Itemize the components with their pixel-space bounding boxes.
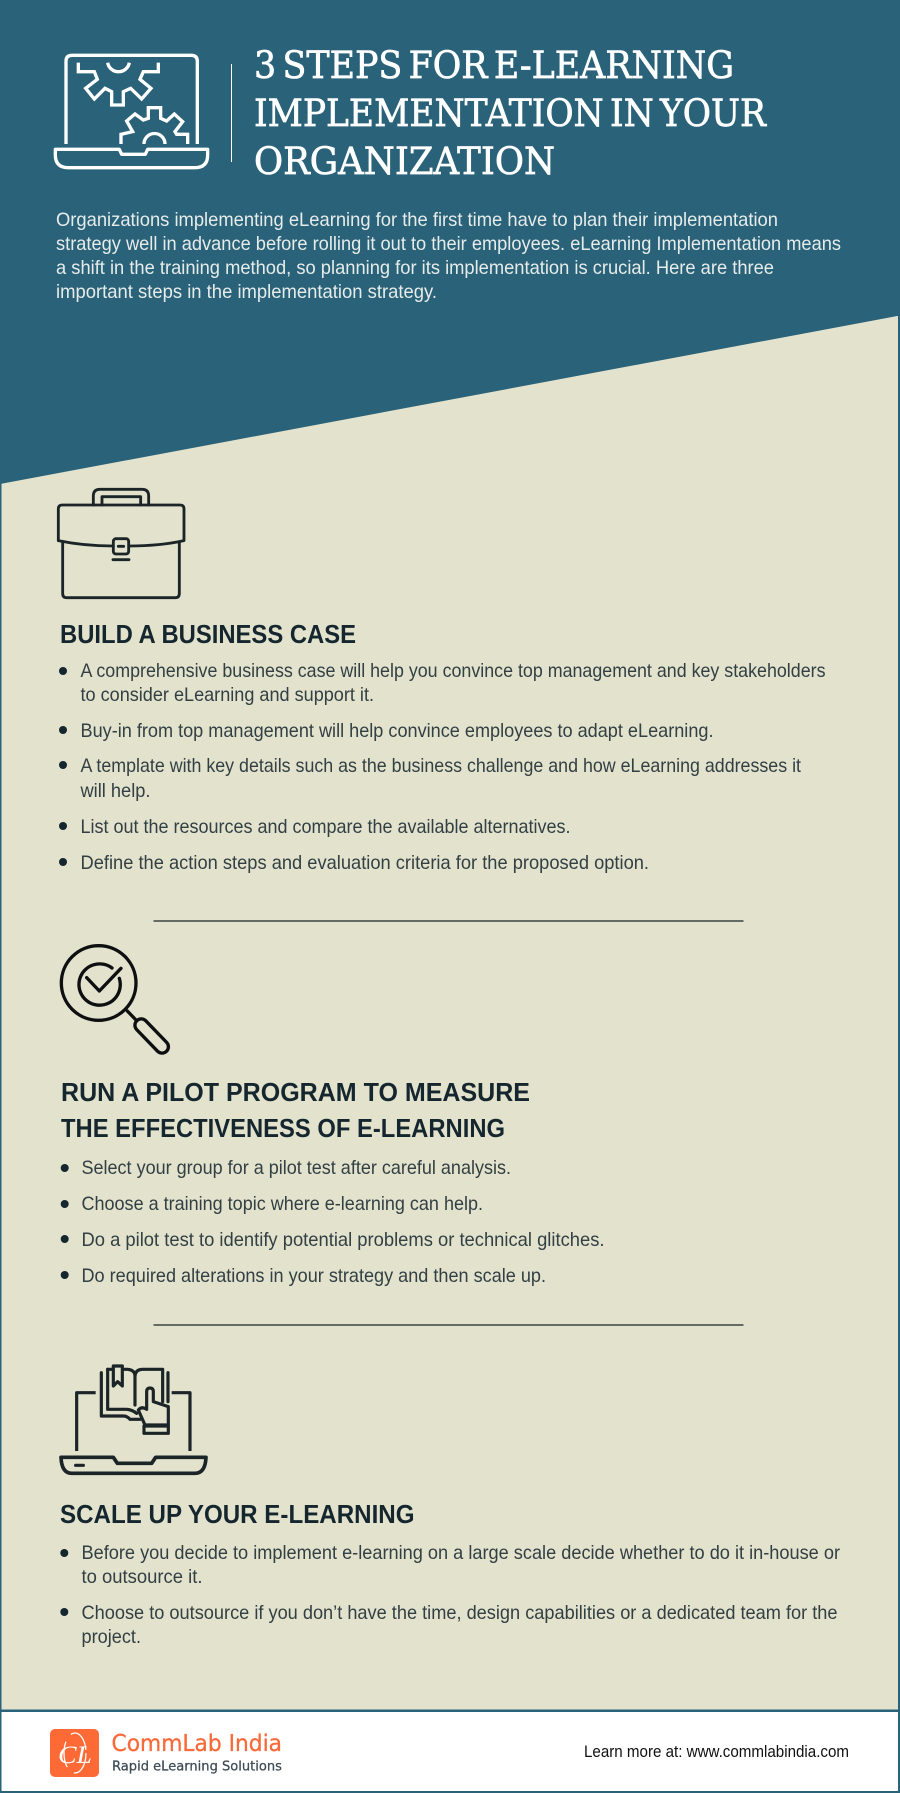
section 2 bullets <box>61 1157 604 1287</box>
section 3 bullets: Before you decide to implement e-learning on a large scale decide whether to do it in-house or <box>82 1542 840 1564</box>
intro paragraph <box>56 209 841 303</box>
icon: laptop with book and pointing hand <box>61 1366 206 1473</box>
section 1 bullets: Define the action steps and evaluation criteria for the proposed option. <box>80 852 649 874</box>
footer link text: Learn more at: www.commlabindia.com <box>584 1743 849 1761</box>
intro paragraph: Organizations implementing eLearning for the first time have to plan their implementation <box>56 209 778 231</box>
logo: CommLab India <box>50 1729 282 1777</box>
title <box>254 44 767 183</box>
section 2 bullets: Select your group for a pilot test after careful analysis. <box>82 1157 511 1179</box>
section 1 bullets: will help. <box>80 780 150 802</box>
section 2 bullets: Do required alterations in your strategy and then scale up. <box>82 1265 546 1287</box>
logo: CommLab India: CL <box>58 1742 92 1769</box>
section 3 bullets: to outsource it. <box>82 1566 202 1588</box>
divider: title rule <box>230 64 232 162</box>
title: 3 STEPS FOR E-LEARNING <box>254 44 734 87</box>
title: IMPLEMENTATION IN YOUR <box>254 92 767 135</box>
section 3 bullets: project. <box>82 1626 141 1648</box>
section 2 bullets: Choose a training topic where e-learning can help. <box>82 1193 483 1215</box>
panel: footer <box>0 1710 900 1793</box>
section 1 bullets <box>59 660 826 874</box>
logo: CommLab India: Rapid eLearning Solutions <box>112 1758 282 1774</box>
section 2 bullets: Do a pilot test to identify potential problems or technical glitches. <box>82 1229 604 1251</box>
section 1 bullets: to consider eLearning and support it. <box>80 684 374 706</box>
title: ORGANIZATION <box>254 140 555 183</box>
section 3 bullets: Choose to outsource if you don’t have the time, design capabilities or a dedicated team for the <box>82 1602 838 1624</box>
section 1 heading: BUILD A BUSINESS CASE <box>60 619 356 649</box>
icon: briefcase <box>58 489 184 598</box>
intro paragraph: a shift in the training method, so planning for its implementation is crucial. Here are three <box>56 257 774 279</box>
section 3 bullets <box>60 1542 840 1648</box>
section 1 bullets: Buy-in from top management will help convince employees to adapt eLearning. <box>80 720 714 742</box>
icon: laptop with gears <box>55 55 208 168</box>
intro paragraph: strategy well in advance before rolling it out to their employees. eLearning Implementation means <box>56 233 841 255</box>
section 1 bullets: A comprehensive business case will help you convince top management and key stakeholders <box>80 660 826 682</box>
section 2 heading <box>61 1077 530 1143</box>
panel: blue header with diagonal edge <box>0 0 900 484</box>
logo: CommLab India: CommLab India <box>112 1731 282 1757</box>
intro paragraph: important steps in the implementation strategy. <box>56 281 437 303</box>
section 1 bullets: List out the resources and compare the available alternatives. <box>80 816 570 838</box>
section 2 heading: RUN A PILOT PROGRAM TO MEASURE <box>61 1077 530 1107</box>
section 1 bullets: A template with key details such as the business challenge and how eLearning addresses it <box>80 755 802 777</box>
section 3 heading: SCALE UP YOUR E-LEARNING <box>60 1499 414 1529</box>
section 2 heading: THE EFFECTIVENESS OF E-LEARNING <box>61 1113 505 1143</box>
icon: magnifier with check <box>61 946 171 1056</box>
